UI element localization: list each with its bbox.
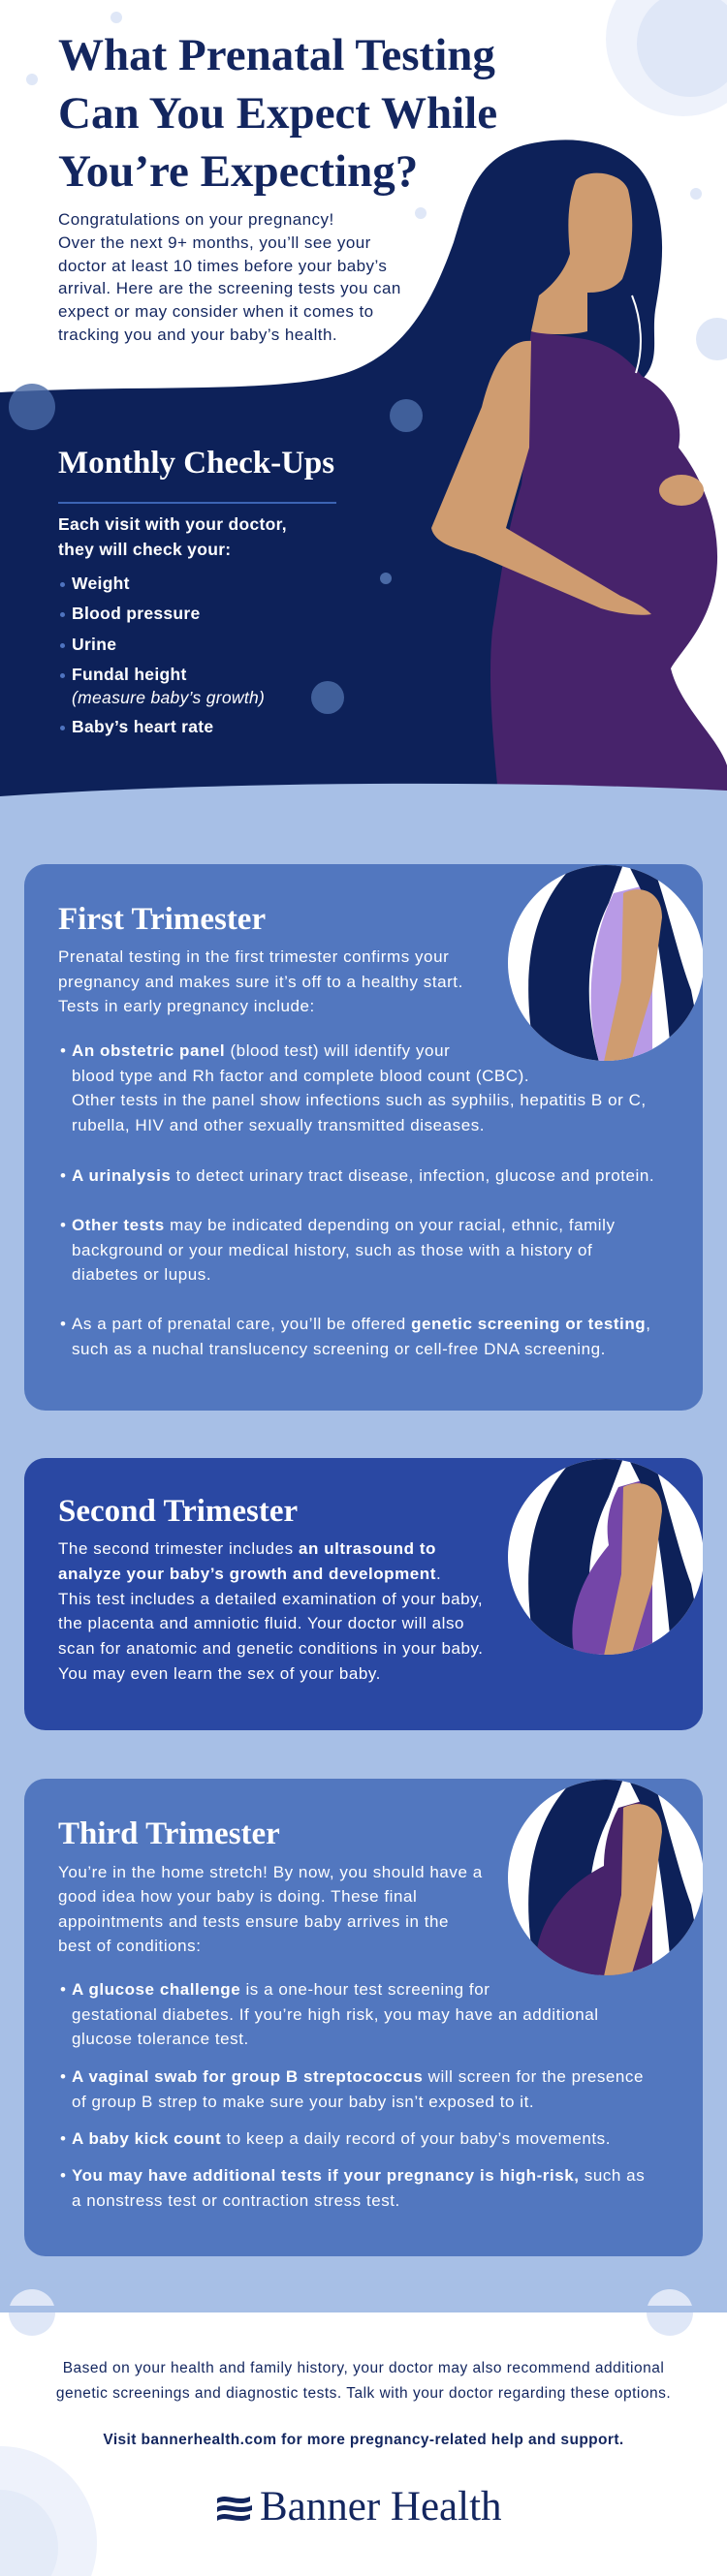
intro text <box>58 210 401 344</box>
illustration circle 1 <box>508 865 703 1061</box>
heading: First Trimester <box>58 902 266 937</box>
first trimester bullets: Other tests may be indicated depending on your racial, ethnic, family <box>72 1216 616 1234</box>
intro text: Congratulations on your pregnancy! <box>58 210 334 229</box>
panel: third trimester <box>24 1779 703 2256</box>
first trimester bullets: A urinalysis to detect urinary tract disease, infection, glucose and protein. <box>72 1166 654 1185</box>
first trimester bullets: diabetes or lupus. <box>72 1265 211 1284</box>
text: scan for anatomic and genetic conditions in your baby. <box>58 1639 484 1658</box>
footer note: genetic screenings and diagnostic tests. Talk with your doctor regarding these options. <box>56 2385 671 2402</box>
intro text: expect or may consider when it comes to <box>58 302 374 321</box>
intro text: arrival. Here are the screening tests you can <box>58 279 401 297</box>
first trimester bullets: Other tests in the panel show infections such as syphilis, hepatitis B or C, <box>72 1091 647 1109</box>
intro: You’re in the home stretch! By now, you should have a <box>58 1863 483 1881</box>
text: This test includes a detailed examination of your baby, <box>58 1590 483 1608</box>
intro text: Over the next 9+ months, you’ll see your <box>58 233 371 252</box>
illustration circle 3 <box>508 1780 703 1975</box>
third trimester bullets: glucose tolerance test. <box>72 2030 249 2048</box>
footer bubbles <box>0 2289 693 2576</box>
text: the placenta and amniotic fluid. Your doctor will also <box>58 1614 464 1632</box>
text <box>58 1539 484 1683</box>
intro text: tracking you and your baby’s health. <box>58 326 337 344</box>
intro text: doctor at least 10 times before your baby’s <box>58 257 387 275</box>
monthly intro <box>58 514 287 559</box>
monthly intro: they will check your: <box>58 540 231 559</box>
intro: Prenatal testing in the first trimester confirms your <box>58 947 449 966</box>
monthly intro: Each visit with your doctor, <box>58 514 287 534</box>
heading: Second Trimester <box>58 1494 298 1529</box>
monthly check-ups heading: Monthly Check-Ups <box>58 446 334 481</box>
navy hair / background wave <box>0 140 662 804</box>
light blue section <box>0 784 727 2312</box>
first trimester bullets <box>60 1041 654 1358</box>
title: You’re Expecting? <box>58 146 418 197</box>
third trimester bullets: gestational diabetes. If you’re high risk, you may have an additional <box>72 2005 599 2024</box>
text: You may even learn the sex of your baby. <box>58 1664 381 1683</box>
intro <box>58 1863 483 1955</box>
first trimester bullets: As a part of prenatal care, you’ll be offered genetic screening or testing, <box>72 1315 650 1333</box>
monthly list: Blood pressure <box>72 604 201 623</box>
title <box>58 30 497 197</box>
woman figure <box>431 173 727 804</box>
third trimester bullets <box>60 1980 645 2210</box>
intro: appointments and tests ensure baby arrives in the <box>58 1912 449 1931</box>
third trimester bullets: of group B strep to make sure your baby isn’t exposed to it. <box>72 2093 534 2111</box>
navy bubbles <box>9 384 423 714</box>
footer note: Based on your health and family history, your doctor may also recommend additional <box>63 2360 664 2376</box>
intro <box>58 947 463 1015</box>
decorative bubbles top <box>26 0 727 360</box>
intro: pregnancy and makes sure it’s off to a healthy start. <box>58 973 463 991</box>
first trimester bullets: background or your medical history, such as those with a history of <box>72 1241 592 1259</box>
footer call to action: Visit bannerhealth.com for more pregnancy-related help and support. <box>103 2432 624 2448</box>
monthly list <box>60 574 265 736</box>
monthly list: (measure baby’s growth) <box>72 688 265 707</box>
panel: first trimester <box>24 864 703 1411</box>
first trimester bullets: rubella, HIV and other sexually transmitted diseases. <box>72 1116 485 1134</box>
third trimester bullets: A glucose challenge is a one-hour test screening for <box>72 1980 490 1999</box>
illustration circle 2 <box>508 1459 703 1655</box>
third trimester bullets: a nonstress test or contraction stress test. <box>72 2191 400 2210</box>
third trimester bullets: You may have additional tests if your pregnancy is high-risk, such as <box>72 2166 645 2185</box>
monthly list: Weight <box>72 574 130 593</box>
intro: Tests in early pregnancy include: <box>58 997 315 1015</box>
title: Can You Expect While <box>58 88 497 139</box>
first trimester bullets: such as a nuchal translucency screening or cell-free DNA screening. <box>72 1340 606 1358</box>
intro: best of conditions: <box>58 1937 201 1955</box>
heading: Third Trimester <box>58 1816 280 1851</box>
text: The second trimester includes an ultrasound to <box>58 1539 436 1558</box>
footer note <box>56 2360 671 2402</box>
text: analyze your baby’s growth and development. <box>58 1565 441 1583</box>
monthly list: Urine <box>72 635 116 654</box>
first trimester bullets: An obstetric panel (blood test) will identify your <box>72 1041 450 1060</box>
monthly list: Fundal height <box>72 665 187 684</box>
first trimester bullets: blood type and Rh factor and complete blood count (CBC). <box>72 1067 529 1085</box>
logo: Banner Health <box>260 2484 502 2529</box>
monthly list: Baby’s heart rate <box>72 717 213 736</box>
third trimester bullets: A vaginal swab for group B streptococcus will screen for the presence <box>72 2067 644 2086</box>
panel: second trimester <box>24 1458 703 1730</box>
title: What Prenatal Testing <box>58 30 495 80</box>
icon: banner waves <box>217 2497 252 2521</box>
third trimester bullets: A baby kick count to keep a daily record of your baby’s movements. <box>72 2129 611 2148</box>
intro: good idea how your baby is doing. These final <box>58 1887 417 1906</box>
